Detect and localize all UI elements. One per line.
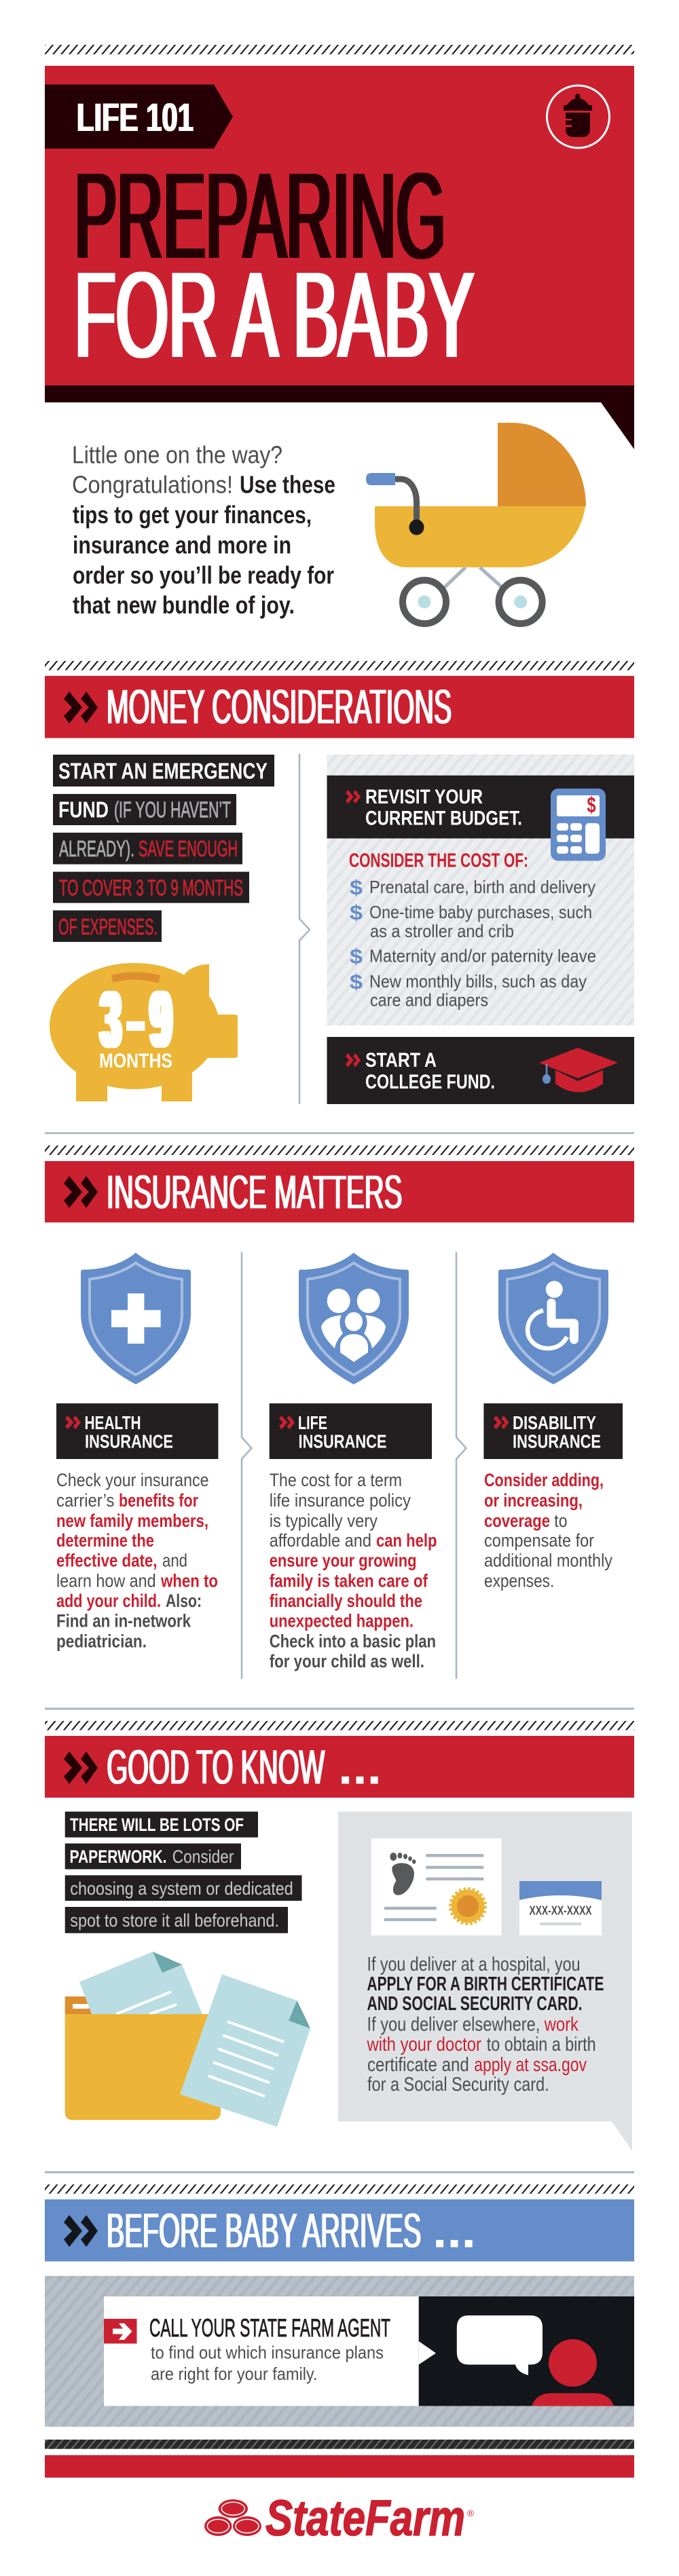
panel: start a college fund (327, 1037, 634, 1104)
text: hospital delivery: with your doctor (367, 2034, 481, 2056)
text: life insurance: financially should the (270, 1591, 422, 1611)
icon: piggy bank: 9 (151, 974, 171, 1065)
list: consider the cost of: care and diapers (370, 989, 488, 1010)
text: life insurance: can help (376, 1530, 437, 1551)
list: consider the cost of: One-time baby purchases, such (369, 902, 592, 922)
label bar: life insurance (270, 1403, 432, 1459)
text: health insurance: effective date, (56, 1551, 158, 1571)
emergency fund callout: OF EXPENSES. (58, 914, 158, 939)
text: disability insurance: to (554, 1511, 568, 1531)
text: health insurance: pediatrician. (56, 1631, 147, 1652)
label bar: health insurance (56, 1403, 218, 1459)
list: consider the cost of: $ (350, 875, 363, 899)
hatch strip: header (45, 45, 634, 54)
text: disability insurance (484, 1470, 613, 1591)
icon: calculator (551, 789, 606, 860)
list: consider the cost of (349, 850, 596, 1010)
label bar: life insurance: INSURANCE (299, 1431, 387, 1452)
label bar: disability insurance: DISABILITY (513, 1412, 596, 1433)
emergency fund callout: SAVE ENOUGH (139, 836, 238, 861)
text: disability insurance: Consider adding, (484, 1470, 604, 1490)
icon: red arrow (104, 2319, 137, 2344)
text: hospital delivery: If you deliver at a hospital, you (367, 1954, 580, 1975)
rule (45, 1707, 634, 1710)
emergency fund callout (53, 755, 274, 942)
header base band with fold (45, 385, 634, 449)
text: life insurance: life insurance policy (270, 1490, 411, 1511)
tag: Life 101 (45, 84, 233, 149)
panel: health insurance (56, 1253, 218, 1652)
intro text (72, 441, 335, 619)
panel: start a college fund: COLLEGE FUND. (365, 1071, 495, 1093)
list: consider the cost of: as a stroller and crib (370, 921, 514, 941)
icon: shield with cross (81, 1253, 191, 1384)
icon: calculator: $ (587, 793, 596, 817)
text: health insurance: Check your insurance (56, 1470, 209, 1490)
arrow divider: insurance 1 (242, 1252, 251, 1679)
section heading: good to know: GOOD TO KNOW (107, 1741, 325, 1795)
intro text: tips to get your finances, (73, 501, 312, 529)
label bar: life insurance: LIFE (298, 1412, 327, 1433)
paperwork callout: spot to store it all beforehand. (70, 1910, 279, 1931)
panel: call your agent (45, 2276, 634, 2427)
icon: piggy bank: 3 (101, 974, 120, 1065)
intro text: that new bundle of joy. (73, 591, 295, 619)
text: disability insurance: additional monthly (484, 1551, 613, 1571)
icon: folder with papers (65, 1952, 310, 2127)
panel: header banner (45, 66, 634, 449)
text: hospital delivery: AND SOCIAL SECURITY CARD. (367, 1993, 583, 2015)
text: life insurance: unexpected happen. (270, 1611, 414, 1631)
label bar: health insurance: INSURANCE (85, 1431, 173, 1452)
intro text: Congratulations! (72, 471, 233, 499)
text: hospital delivery (367, 1954, 604, 2096)
panel: birth certificate and social security (338, 1812, 632, 2151)
emergency fund callout: FUND (58, 797, 109, 822)
text: call your state farm agent (149, 2314, 390, 2384)
label bar: disability insurance: INSURANCE (513, 1431, 601, 1452)
icon: piggy bank: MONTHS (99, 1050, 172, 1072)
paperwork callout: PAPERWORK. (69, 1846, 167, 1867)
icon: baby bottle (547, 86, 610, 148)
paperwork callout: choosing a system or dedicated (70, 1878, 293, 1899)
emergency fund callout: (IF YOU HAVEN’T (114, 797, 231, 822)
emergency fund callout: START AN EMERGENCY (58, 758, 268, 783)
text: hospital delivery: work (544, 2013, 579, 2035)
text: health insurance: learn how and (56, 1571, 156, 1591)
paperwork callout: THERE WILL BE LOTS OF (70, 1815, 244, 1835)
emergency fund callout: ALREADY). (59, 836, 134, 861)
text: health insurance: and (162, 1551, 187, 1571)
logo: State Farm: ® (467, 2508, 474, 2518)
text: life insurance (270, 1470, 437, 1671)
text: hospital delivery: apply at ssa.gov (474, 2054, 587, 2076)
paperwork callout: Consider (172, 1846, 234, 1867)
intro text: Little one on the way? (72, 441, 282, 469)
text: life insurance: Check into a basic plan (270, 1631, 436, 1652)
icon: social security card: XXX-XX-XXXX (530, 1903, 592, 1918)
intro text: order so you’ll be ready for (73, 561, 334, 589)
footer red bar (45, 2455, 634, 2478)
panel: disability insurance (483, 1253, 623, 1591)
text: hospital delivery: for a Social Security card. (367, 2074, 549, 2096)
title (75, 148, 474, 383)
paperwork callout (65, 1812, 301, 1933)
hatch strip: money (45, 661, 634, 670)
text: disability insurance: coverage (484, 1511, 550, 1531)
icon: graduation cap (539, 1048, 618, 1093)
label bar: health insurance: HEALTH (84, 1412, 141, 1433)
heading: revisit your current budget (346, 786, 522, 830)
hatch strip: good to know (45, 1721, 634, 1730)
list: consider the cost of: New monthly bills, such as day (369, 971, 587, 991)
text: call your state farm agent: are right for your family. (151, 2364, 318, 2384)
icon: stroller (366, 423, 586, 624)
section heading: good to know (45, 1736, 634, 1798)
section heading: insurance matters: INSURANCE MATTERS (107, 1166, 402, 1219)
icon: social security card (519, 1881, 602, 1935)
hatch strip: footer (45, 2440, 634, 2449)
text: health insurance (56, 1470, 218, 1652)
text: health insurance: Find an in-network (56, 1611, 191, 1631)
text: hospital delivery: to obtain a birth (487, 2034, 596, 2056)
text: life insurance: affordable and (270, 1530, 371, 1551)
text: disability insurance: or increasing, (484, 1490, 583, 1511)
text: life insurance: for your child as well. (270, 1651, 424, 1671)
section heading: before baby arrives: ... (433, 2205, 476, 2258)
icon: shield with wheelchair (498, 1253, 608, 1384)
section heading: before baby arrives: BEFORE BABY ARRIVES (107, 2205, 421, 2258)
text: hospital delivery: certificate and (367, 2054, 469, 2076)
text: disability insurance: compensate for (484, 1530, 594, 1551)
panel: start a college fund: START A (365, 1049, 437, 1072)
icon: birth certificate (371, 1838, 502, 1935)
text: life insurance: is typically very (270, 1511, 378, 1531)
text: call your state farm agent: CALL YOUR STATE FARM AGENT (149, 2314, 390, 2342)
icon: piggy bank: - (124, 974, 148, 1065)
intro text: insurance and more in (73, 531, 291, 559)
icon: agent with speech bubble (457, 2315, 614, 2406)
text: health insurance: add your child. (56, 1591, 161, 1611)
text: life insurance: family is taken care of (270, 1571, 428, 1591)
panel: revisit your budget (327, 755, 634, 1025)
logo: State Farm: StateFarm (265, 2490, 465, 2546)
list: consider the cost of: Prenatal care, birth and delivery (369, 877, 595, 897)
rule (45, 2172, 634, 2173)
icon: shield with family (299, 1253, 409, 1384)
text: call your state farm agent: to find out which insurance plans (151, 2343, 384, 2363)
text: health insurance: Also: (166, 1591, 202, 1611)
hatch strip: before baby (45, 2184, 634, 2194)
list: consider the cost of: $ (350, 901, 363, 924)
section heading: good to know: ... (338, 1741, 382, 1795)
text: health insurance: benefits for (119, 1490, 198, 1511)
arrow divider: insurance 2 (456, 1252, 466, 1679)
intro text: Use these (240, 471, 335, 499)
heading: revisit your current budget: REVISIT YOUR (365, 786, 483, 808)
text: health insurance: when to (160, 1571, 218, 1591)
logo: State Farm (204, 2490, 474, 2546)
emergency fund callout: TO COVER 3 TO 9 MONTHS (59, 875, 243, 900)
text: health insurance: carrier’s (56, 1490, 114, 1511)
tag: Life 101: LIFE 101 (77, 96, 194, 140)
label bar: disability insurance (483, 1403, 623, 1459)
panel: life insurance (270, 1253, 437, 1671)
list: consider the cost of: $ (350, 945, 363, 968)
text: disability insurance: expenses. (484, 1571, 554, 1591)
text: life insurance: ensure your growing (270, 1551, 417, 1571)
hatch strip: insurance (45, 1145, 634, 1155)
text: health insurance: determine the (56, 1530, 154, 1551)
icon: piggy bank (50, 963, 238, 1101)
rule (45, 1132, 634, 1134)
text: health insurance: new family members, (56, 1511, 208, 1531)
list: consider the cost of: $ (350, 970, 363, 993)
text: hospital delivery: If you deliver elsewhere, (367, 2013, 540, 2035)
heading: revisit your current budget: CURRENT BUDGET. (365, 808, 522, 830)
arrow divider: money (299, 754, 310, 1104)
text: life insurance: The cost for a term (270, 1470, 402, 1490)
list: consider the cost of: Maternity and/or paternity leave (369, 946, 596, 966)
logo mark: three ovals (204, 2499, 261, 2536)
list: consider the cost of: CONSIDER THE COST OF: (349, 850, 528, 872)
